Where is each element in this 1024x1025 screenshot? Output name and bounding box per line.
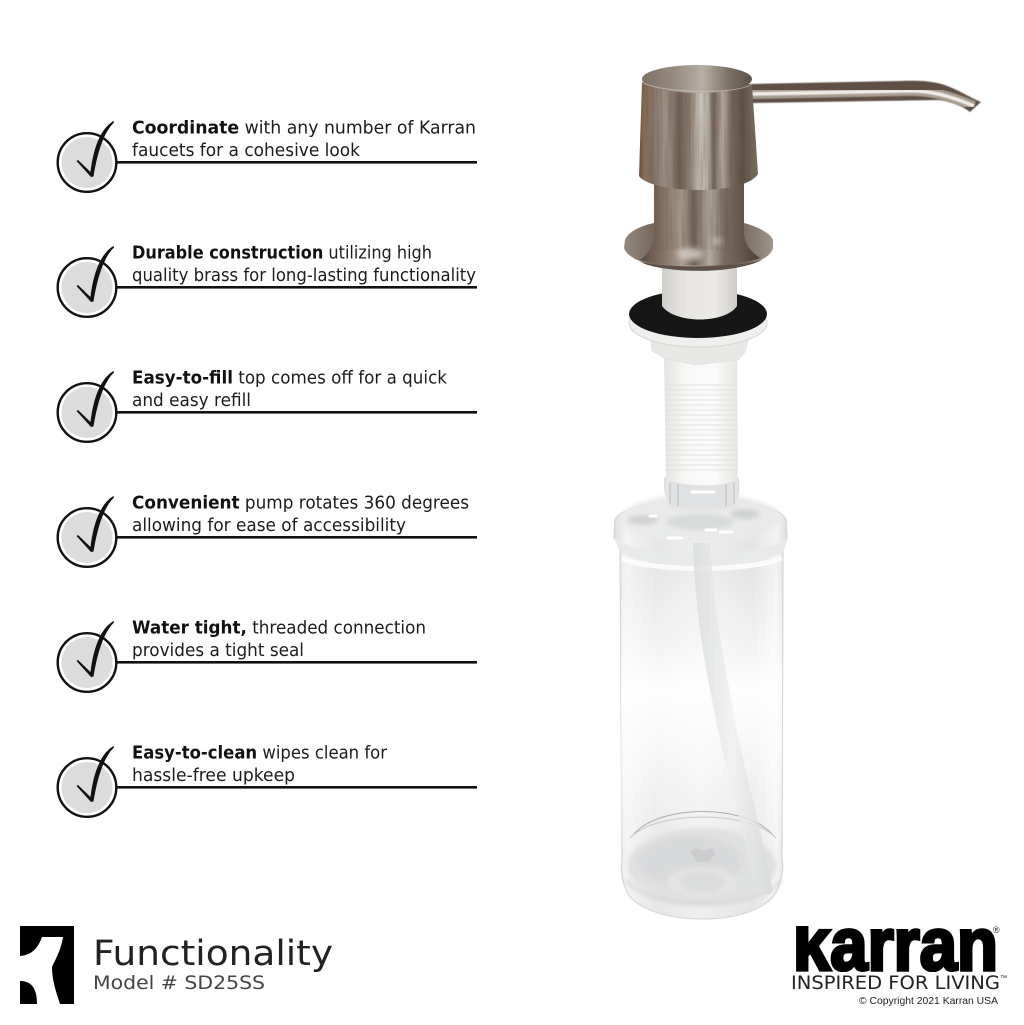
hex nut [651, 340, 748, 365]
icon: check mark circle [58, 371, 116, 442]
icon: check mark circle [58, 746, 116, 817]
white washer [629, 299, 767, 347]
registered mark: ® [993, 925, 1000, 935]
text: easy-to-fill line 2: and easy refill [132, 390, 251, 411]
dip tube [693, 543, 772, 895]
text: durable line 2: quality brass for long-lasting functionality [132, 265, 476, 286]
neck [640, 180, 760, 266]
bottle [614, 478, 787, 919]
panel: feature list [58, 118, 477, 817]
upper thread [662, 265, 737, 320]
rule [116, 661, 477, 664]
threaded tube [664, 358, 738, 486]
icon: check mark circle [58, 496, 116, 567]
text: water tight line 2: provides a tight seal [132, 640, 304, 661]
footer: title block [20, 926, 333, 1004]
brand name: karran [793, 903, 998, 986]
text: convenient line 2: allowing for ease of accessibility [132, 515, 406, 536]
trademark: ™ [1000, 975, 1007, 982]
feature: easy-to-fill [58, 368, 477, 442]
base emblem [690, 848, 715, 862]
feature: convenient [58, 492, 477, 567]
text: easy-to-clean line 2: hassle-free upkeep [132, 765, 295, 786]
footer: karran logo [792, 926, 1006, 1006]
rule [116, 536, 477, 539]
black washer [629, 290, 767, 338]
feature: coordinate [58, 118, 477, 192]
heading: functionality: Functionality [93, 934, 333, 974]
flange [624, 223, 773, 271]
rule [116, 161, 477, 164]
feature: water tight [58, 618, 477, 692]
text: coordinate line 2: faucets for a cohesive look [132, 140, 361, 161]
text: durable construction: Durable construction utilizing high [132, 242, 432, 264]
text: model number: Model # SD25SS [93, 972, 265, 994]
shoulder glass [621, 480, 781, 542]
text: coordinate: Coordinate with any number of Karran [132, 118, 476, 138]
icon: check mark circle [58, 121, 116, 192]
text: easy-to-clean: Easy-to-clean wipes clean for [132, 742, 388, 764]
tagline: INSPIRED FOR LIVING [791, 972, 1000, 994]
rule [116, 786, 477, 789]
cap [636, 65, 762, 195]
text: water tight: Water tight, threaded connection [132, 618, 426, 638]
icon: R logo [20, 926, 74, 1004]
icon: check mark circle [58, 246, 116, 317]
rule [116, 286, 477, 289]
text: convenient: Convenient pump rotates 360 degrees [132, 492, 469, 514]
feature: easy-to-clean [58, 742, 477, 817]
rule [116, 411, 477, 414]
text: easy-to-fill: Easy-to-fill top comes off for a quick [132, 368, 448, 388]
feature: durable construction [58, 242, 477, 317]
product: soap dispenser [614, 65, 981, 919]
icon: check mark circle [58, 621, 116, 692]
copyright: © Copyright 2021 Karran USA [859, 996, 998, 1007]
spout [750, 81, 981, 112]
bottle base [626, 828, 782, 904]
